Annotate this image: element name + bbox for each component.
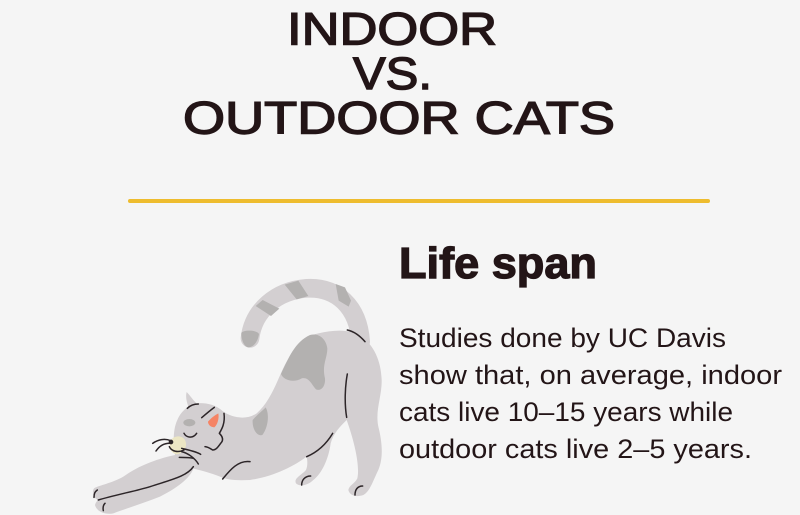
body text: cats live 10–15 years while bbox=[399, 397, 733, 427]
cat nose bbox=[169, 440, 173, 444]
title bbox=[183, 4, 615, 144]
cat grey patches bbox=[183, 334, 327, 435]
cat body bbox=[93, 331, 382, 514]
cat inner ear bbox=[208, 413, 219, 427]
body text bbox=[399, 323, 782, 464]
cat tail bbox=[241, 281, 361, 347]
body text: outdoor cats live 2–5 years. bbox=[399, 434, 752, 464]
body text: show that, on average, indoor bbox=[399, 360, 782, 390]
title: VS. bbox=[353, 48, 432, 99]
body text: Studies done by UC Davis bbox=[399, 323, 726, 353]
cat line details bbox=[94, 330, 365, 511]
title: INDOOR bbox=[287, 4, 497, 54]
title: OUTDOOR CATS bbox=[183, 92, 615, 144]
yellow divider bbox=[128, 199, 710, 203]
heading: life span: Life span bbox=[399, 239, 597, 288]
cat muzzle bbox=[170, 436, 186, 454]
illustration: stretching grey cat bbox=[93, 281, 382, 514]
